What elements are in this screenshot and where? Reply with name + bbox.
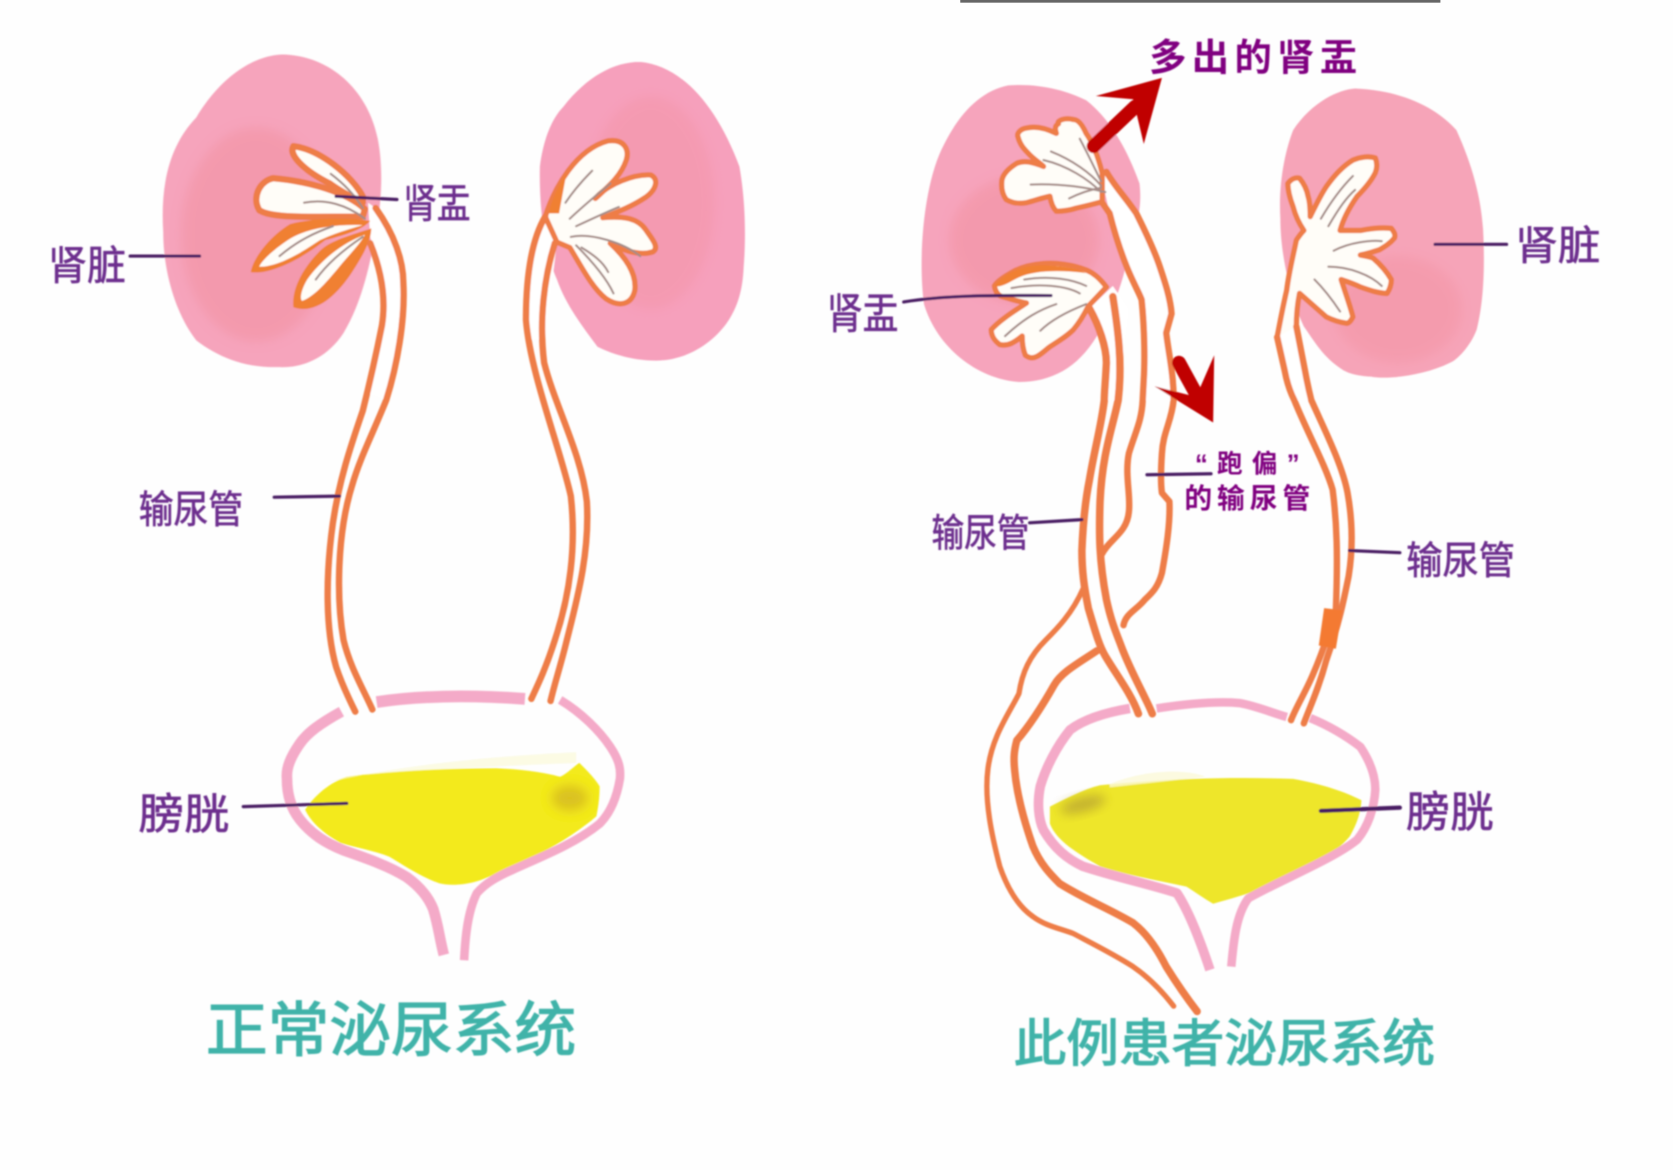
label: bladder (139, 791, 347, 839)
patient right kidney (1280, 89, 1484, 378)
left ureter (328, 208, 404, 712)
title: this patient's urinary system: 此例患者泌尿系统 (1014, 1016, 1435, 1073)
upper extra calyces (1002, 119, 1105, 211)
title: normal urinary system: 正常泌尿系统 (206, 997, 576, 1064)
panel: this patient's urinary system (827, 36, 1600, 1073)
arrow: stray ureter (1154, 355, 1214, 423)
ureter lumens over kidney (1089, 170, 1311, 400)
heading: extra renal pelvis: 多出的肾盂 (1149, 36, 1357, 78)
patient right calyces (1277, 157, 1395, 337)
label: ureter left: 输尿管 (931, 512, 1030, 555)
label: ureter right: 输尿管 (1406, 540, 1515, 583)
branch ureters to ectopic opening (987, 589, 1197, 1011)
label: kidney right: 肾脏 (1515, 222, 1600, 268)
label: bladder right: 膀胱 (1406, 789, 1494, 837)
right kidney calyces (545, 141, 656, 304)
left kidney calyces (251, 146, 371, 309)
bladder wall (287, 712, 444, 955)
label: renal pelvis (336, 181, 471, 227)
label: renal pelvis (827, 291, 1051, 339)
label: bladder: 膀胱 (139, 791, 229, 839)
patient bladder (1038, 702, 1375, 970)
right ureter (526, 217, 587, 701)
label: renal pelvis: 肾盂 (827, 291, 898, 339)
bladder (287, 696, 620, 960)
right ureter white lumen (527, 217, 557, 339)
urine (1050, 778, 1361, 904)
label: ureter: 输尿管 (139, 489, 243, 532)
right kidney (540, 62, 745, 361)
left kidney (163, 54, 381, 367)
patient right ureter (1277, 326, 1352, 723)
bladder wall (1038, 708, 1210, 970)
callout: stray ureter: 的输尿管 (1184, 483, 1310, 514)
urine (305, 763, 600, 885)
left ureter white lumen (368, 203, 404, 400)
callout: stray ureter: “跑偏” (1195, 450, 1300, 479)
label: renal pelvis: 肾盂 (403, 181, 471, 227)
panel: normal urinary system (48, 54, 745, 1064)
normal ureter of duplex side (1082, 297, 1152, 714)
label: kidney: 肾脏 (48, 243, 126, 289)
patient left kidney (922, 85, 1140, 382)
label: bladder right (1321, 789, 1494, 837)
callout: stray ureter (1147, 450, 1310, 514)
stray ureter with extra renal pelvis (1102, 172, 1174, 625)
labels (48, 181, 471, 839)
arrow: extra renal pelvis (1094, 78, 1162, 146)
lower calyces (991, 263, 1106, 358)
